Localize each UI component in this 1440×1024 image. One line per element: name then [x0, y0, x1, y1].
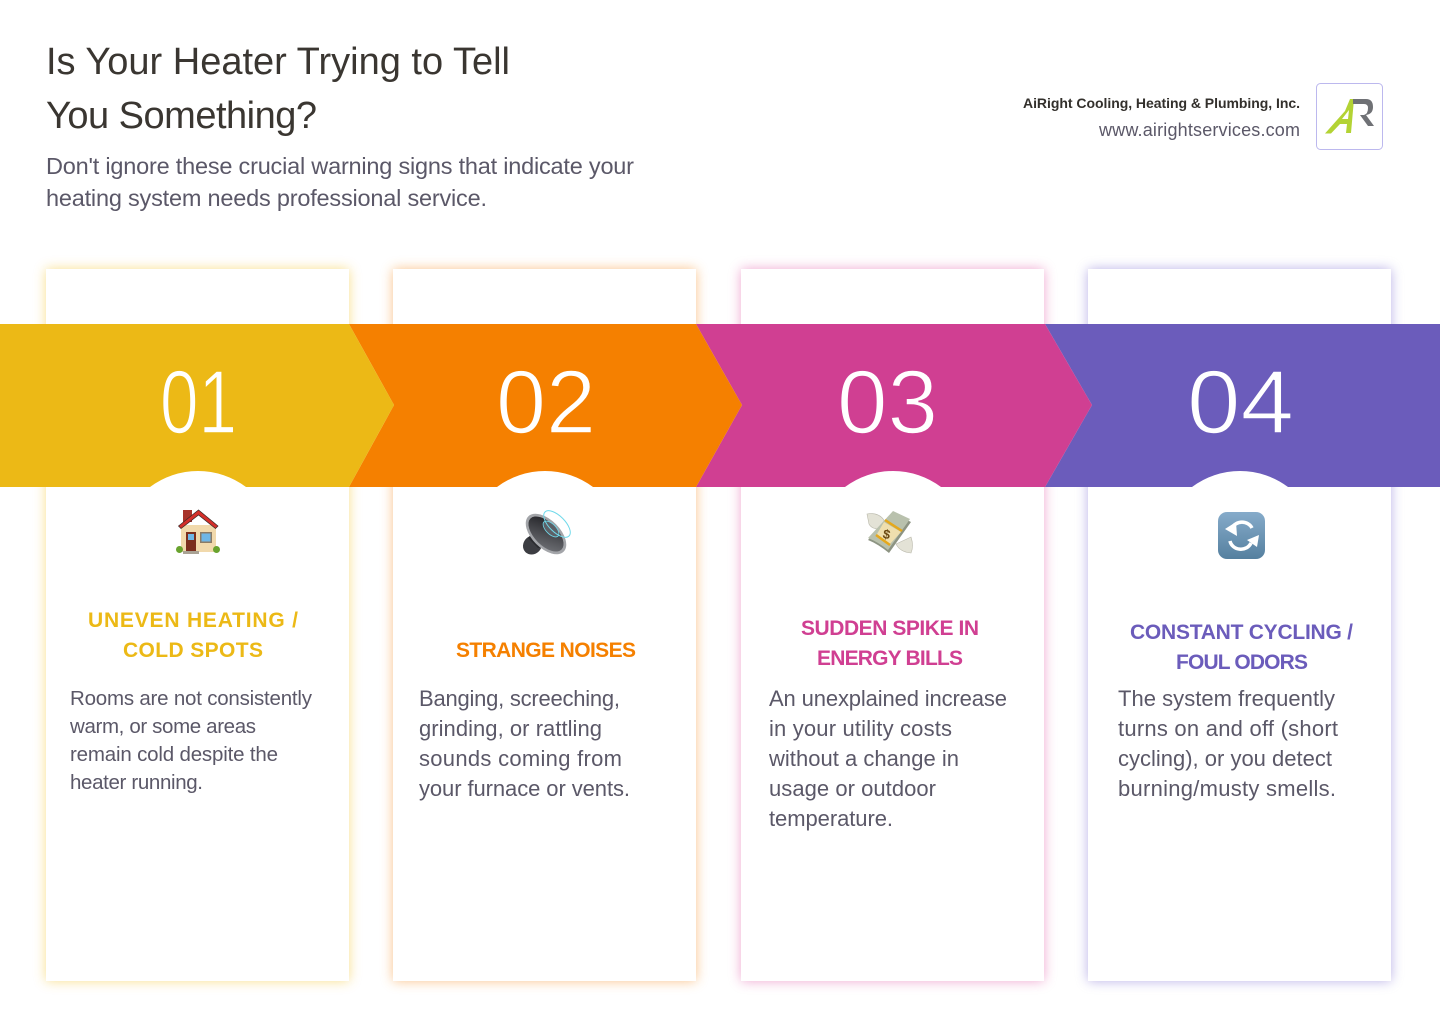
card 3 heading: ENERGY BILLS: [817, 647, 963, 670]
card 1 heading: [88, 609, 298, 662]
arrow banner 2: [349, 324, 742, 487]
icon: house: [176, 510, 220, 554]
card 2 body text: your furnace or vents.: [419, 776, 630, 801]
card 2 body text: Banging, screeching,: [419, 686, 620, 711]
header title: [46, 41, 510, 137]
card 1 body text: [69, 687, 313, 794]
card 3 heading: SUDDEN SPIKE IN: [801, 617, 979, 640]
card 3 heading: [801, 617, 979, 670]
card 3 body text: usage or outdoor: [769, 776, 936, 801]
icon: speaker: [518, 506, 575, 562]
card 1 body text: warm, or some areas: [69, 715, 256, 738]
company name and website: [1023, 95, 1300, 140]
card 4 heading: FOUL ODORS: [1176, 651, 1308, 674]
icon notch 1: [150, 471, 246, 487]
card 3 background: [741, 269, 1044, 981]
icon: money with wings: [867, 511, 912, 553]
card 4 background: [1088, 269, 1391, 981]
number 01: 01: [160, 353, 237, 453]
card 4 body text: burning/musty smells.: [1118, 776, 1336, 801]
header title: Is Your Heater Trying to Tell: [46, 41, 510, 83]
arrow banner 1: [0, 324, 394, 487]
header subtitle: heating system needs professional service.: [46, 185, 487, 211]
card 2 body text: [419, 686, 630, 801]
card 4 body text: [1118, 686, 1338, 801]
card 4 body text: cycling), or you detect: [1118, 746, 1332, 771]
company name and website: AiRight Cooling, Heating & Plumbing, Inc.: [1023, 95, 1300, 111]
arrow banner 3: [696, 324, 1092, 487]
card 2 heading: STRANGE NOISES: [456, 639, 636, 662]
card 1 body text: heater running.: [70, 771, 203, 794]
header subtitle: Don't ignore these crucial warning signs that indicate your: [46, 153, 634, 179]
card 2 background: [393, 269, 696, 981]
card 4 heading: CONSTANT CYCLING /: [1130, 621, 1353, 644]
header subtitle: [46, 153, 634, 211]
arrow banner 4: [1045, 324, 1440, 487]
icon: repeat arrows: [1218, 512, 1265, 559]
icon notch 4: [1192, 471, 1288, 487]
header title: You Something?: [46, 95, 317, 137]
card 3 body text: [768, 686, 1007, 831]
card 1 body text: remain cold despite the: [70, 743, 278, 766]
card 1 body text: Rooms are not consistently: [70, 687, 313, 710]
card 4 body text: turns on and off (short: [1118, 716, 1338, 741]
card 3 body text: An unexplained increase: [769, 686, 1007, 711]
number 03: 03: [837, 353, 938, 453]
icon notch 2: [497, 471, 593, 487]
card 2 body text: grinding, or rattling: [419, 716, 602, 741]
card 3 body text: without a change in: [768, 746, 959, 771]
card 1 heading: UNEVEN HEATING /: [88, 609, 298, 632]
number 04: 04: [1187, 353, 1294, 453]
card 2 body text: sounds coming from: [419, 746, 622, 771]
card 1 heading: COLD SPOTS: [123, 639, 263, 662]
icon: money with wings: $: [881, 526, 892, 542]
icon notch 3: [845, 471, 941, 487]
card 3 body text: in your utility costs: [769, 716, 952, 741]
company logo: [1316, 84, 1382, 150]
card 3 body text: temperature.: [769, 806, 893, 831]
card 4 heading: [1130, 621, 1353, 674]
company name and website: www.airightservices.com: [1098, 120, 1300, 140]
card 1 background: [46, 269, 349, 981]
card 4 body text: The system frequently: [1118, 686, 1335, 711]
number 02: 02: [496, 353, 596, 453]
